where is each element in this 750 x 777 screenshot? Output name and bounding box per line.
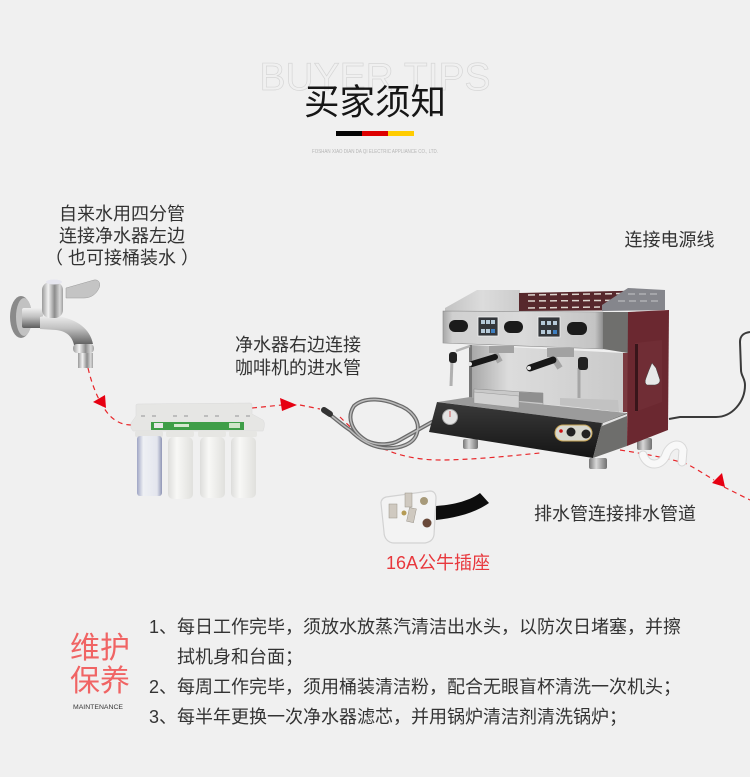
tap: handle <box>66 280 100 298</box>
machine: pressure gauge <box>442 410 458 424</box>
label: drain pipe: 排水管连接排水管道 <box>534 504 696 524</box>
icon: water tap <box>10 280 100 368</box>
machine: back post <box>469 345 472 399</box>
label: inlet pipe: 净水器右边连接 <box>235 335 361 355</box>
machine: group heads and portafilters <box>468 346 574 370</box>
label: water tap instructions: （ 也可接桶装水 ） <box>45 248 199 268</box>
power cord <box>669 332 750 419</box>
machine: grey top cover <box>602 288 665 311</box>
dashed arrow: filter to hose <box>252 398 320 411</box>
label: water tap instructions <box>45 204 199 268</box>
machine: back splash <box>470 345 623 412</box>
tap: spout <box>40 315 93 345</box>
machine: grey side <box>603 312 628 353</box>
filter: clear housing <box>135 431 163 496</box>
label: water tap instructions: 自来水用四分管 <box>59 204 185 224</box>
plug: body <box>381 491 436 543</box>
plug: holes <box>402 497 432 528</box>
machine: front steel panel <box>443 311 603 349</box>
machine: cup rack <box>474 389 543 407</box>
filter: white housing 2 <box>166 431 194 499</box>
title: English ghost text: BUYER TIPS <box>260 56 490 99</box>
maintenance heading <box>70 632 130 711</box>
machine: control plate <box>555 425 592 441</box>
drain hose <box>643 445 683 464</box>
machine: maroon side <box>627 310 669 446</box>
label: water tap instructions: 连接净水器左边 <box>59 226 185 246</box>
label: power cord: 连接电源线 <box>624 230 714 250</box>
machine: door <box>635 340 662 412</box>
machine: panel on splash <box>560 398 619 412</box>
machine: display panels <box>478 317 560 337</box>
tap: column <box>42 282 63 318</box>
label: 16A plug: 16A公牛插座 <box>386 553 490 573</box>
machine: logo <box>645 363 660 385</box>
dashed arrow: under machine to drain <box>340 417 750 500</box>
company line: FOSHAN XIAO DIAN DA QI ELECTRIC APPLIANCE CO., LTD. <box>312 149 438 155</box>
heading: English caption: MAINTENANCE <box>73 705 123 711</box>
maintenance list: 3、每半年更换一次净水器滤芯，并用锅炉清洁剂清洗锅炉； <box>149 707 627 727</box>
filter: green label <box>151 422 244 430</box>
water filter <box>131 403 264 499</box>
machine: rear maroon rail <box>519 290 665 311</box>
tricolor bar <box>336 131 414 136</box>
plug: pins <box>389 493 416 523</box>
machine: panel knobs <box>449 320 587 335</box>
filter: white housing 4 <box>229 431 257 498</box>
dashed arrow: tap to filter <box>88 368 132 425</box>
machine: feet <box>463 438 652 469</box>
machine: top tray <box>445 290 520 311</box>
filter: bracket <box>131 403 264 431</box>
heading: 保养: 保养 <box>70 665 130 698</box>
maintenance list: 1、每日工作完毕，须放水放蒸汽清洁出水头，以防次日堵塞，并擦 <box>149 617 681 637</box>
inlet hose <box>324 399 432 448</box>
maintenance list <box>149 617 681 727</box>
heading: 维护: 维护 <box>70 632 130 665</box>
machine: grey right front <box>593 413 627 458</box>
title block <box>260 56 490 155</box>
machine: black front <box>429 402 602 458</box>
maintenance list: 2、每周工作完毕，须用桶装清洁粉，配合无眼盲杯清洗一次机头； <box>149 677 681 697</box>
filter: white housing 3 <box>198 431 226 498</box>
machine: steam wands <box>449 346 588 398</box>
machine: cup rack front <box>474 392 519 408</box>
maintenance list: 拭机身和台面； <box>177 647 303 667</box>
title: 买家须知: 买家须知 <box>304 82 446 122</box>
tap: wall flange <box>10 296 32 338</box>
coffee machine <box>429 288 669 469</box>
plug: cable <box>436 493 489 520</box>
tap: hex nut <box>22 308 43 328</box>
filter: valve dots <box>141 415 250 417</box>
label: inlet pipe: 咖啡机的进水管 <box>235 358 361 378</box>
icon: power plug <box>381 491 489 543</box>
tap: nozzle <box>73 344 94 368</box>
machine: drip tray <box>438 397 627 423</box>
label: inlet pipe <box>235 335 361 378</box>
